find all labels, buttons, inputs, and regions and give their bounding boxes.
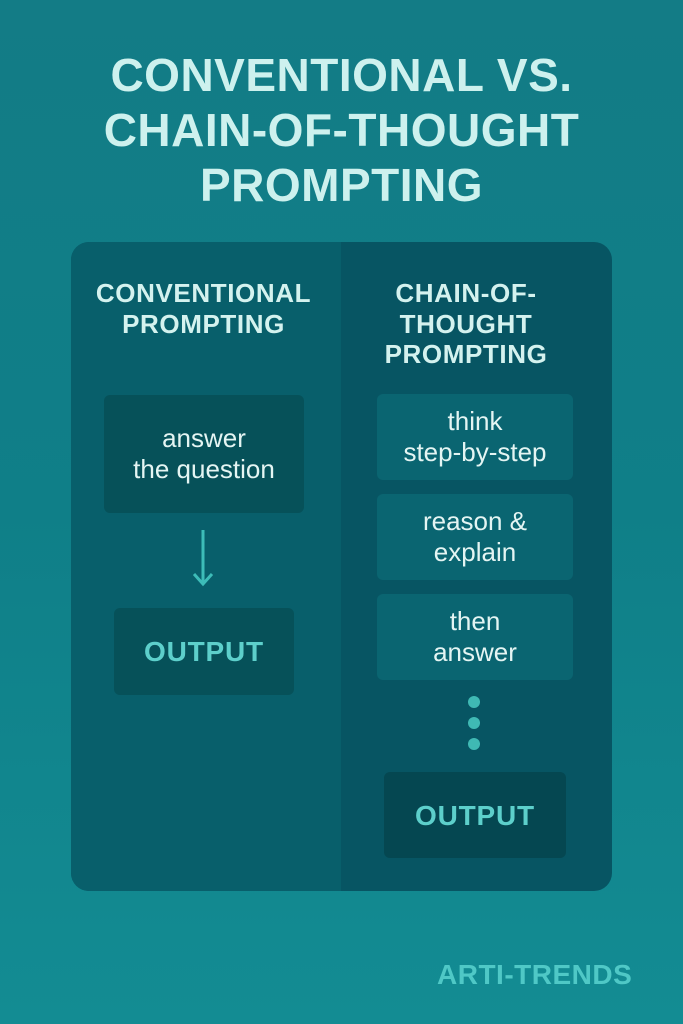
step: think step-by-step <box>377 394 573 480</box>
box: output <box>114 608 294 695</box>
box: output: OUTPUT <box>144 636 264 667</box>
panel: chain-of-thought column <box>377 278 573 858</box>
step: think step-by-step: step-by-step <box>403 437 547 467</box>
title: PROMPTING <box>200 159 483 211</box>
step: think step-by-step: think <box>448 406 502 436</box>
step: reason & explain: reason & <box>423 506 527 536</box>
heading: conventional prompting: PROMPTING <box>122 308 285 338</box>
box: answer the question: answer <box>162 423 246 453</box>
heading: conventional prompting: CONVENTIONAL <box>96 278 311 308</box>
icon: vertical dots <box>468 696 480 750</box>
panel: conventional column <box>71 242 341 891</box>
heading: chain-of-thought prompting: PROMPTING <box>385 339 547 369</box>
step: reason & explain <box>377 494 573 580</box>
heading: chain-of-thought prompting: CHAIN-OF- <box>395 278 537 308</box>
box: answer the question: the question <box>133 454 275 484</box>
heading: chain-of-thought prompting <box>385 278 547 369</box>
step: then answer: then <box>450 606 500 636</box>
box: answer the question <box>104 395 304 513</box>
title: CHAIN-OF-THOUGHT <box>104 104 579 156</box>
brand: ARTI-TRENDS: ARTI-TRENDS <box>437 959 632 990</box>
title: CONVENTIONAL VS. <box>110 49 573 101</box>
arrow: down <box>193 530 213 586</box>
box: output <box>384 772 566 858</box>
heading: conventional prompting <box>96 278 311 338</box>
step: reason & explain: explain <box>434 537 516 567</box>
panel: comparison <box>71 242 612 891</box>
title <box>104 49 579 211</box>
heading: chain-of-thought prompting: THOUGHT <box>400 308 532 338</box>
step: then answer: answer <box>433 637 517 667</box>
step: then answer <box>377 594 573 680</box>
box: output: OUTPUT <box>415 800 535 830</box>
